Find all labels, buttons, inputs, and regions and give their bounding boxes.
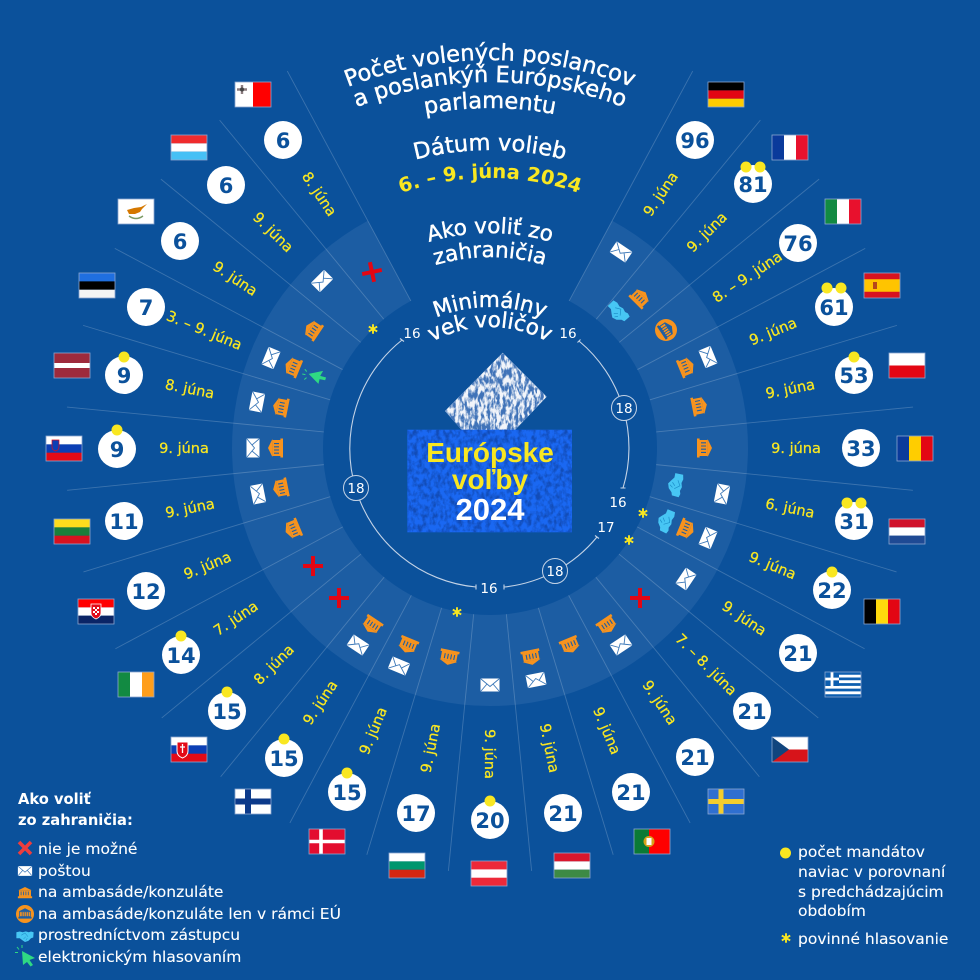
icon: post (311, 270, 333, 292)
flag: Slovakia (171, 737, 207, 762)
seats: Sweden: 21 (680, 746, 710, 770)
seats: Lithuania (105, 502, 143, 540)
country: Finland (235, 614, 384, 814)
icon: embassy (360, 614, 384, 637)
flag: Cyprus (118, 199, 154, 224)
icon: embassy (520, 648, 542, 667)
seats: Spain (815, 282, 853, 326)
heading: minimum voter age: Minimálny (432, 290, 548, 319)
country: Spain (676, 273, 900, 378)
seats: France (734, 162, 772, 203)
flag: Denmark (309, 829, 345, 854)
icon: post (698, 346, 718, 368)
icon: post (675, 567, 697, 591)
icon: post (249, 391, 265, 413)
seats: Hungary (544, 794, 582, 832)
icon: post (698, 527, 718, 549)
seats: Bulgaria (397, 794, 435, 832)
date: Latvia: 8. júna (164, 377, 216, 402)
icon: post (261, 347, 281, 369)
icon: proxy (666, 472, 684, 497)
icon: post (525, 672, 547, 688)
seats: Latvia: 9 (117, 364, 131, 388)
seats: Greece (779, 634, 817, 672)
flag: Croatia (78, 599, 114, 624)
legend: how to vote from abroad (15, 791, 341, 966)
flag: Portugal (634, 829, 670, 854)
seats: Sweden (676, 738, 714, 776)
minimum age ring chart: 18 (546, 564, 564, 580)
heading: minimum voter age line 2: vek voličov (427, 311, 553, 340)
flag: Latvia (54, 353, 90, 378)
icon: embassy (282, 355, 303, 378)
ballot box title (426, 437, 554, 527)
date: Italy: 8. – 9. júna (710, 249, 786, 306)
icon: compulsory voting (453, 607, 461, 617)
icon: embassy (282, 518, 303, 541)
icon: post (246, 438, 260, 458)
heading: election date value: 6. – 9. júna 2024 (399, 162, 581, 192)
flag: Netherlands (889, 519, 925, 544)
icon: embassy (559, 635, 582, 656)
seats: Poland (835, 352, 873, 394)
seats: Ireland: 14 (166, 644, 196, 668)
seats: Slovenia (98, 424, 136, 468)
seats: Denmark (328, 768, 366, 811)
seats: Lithuania: 11 (109, 510, 139, 534)
seats: Poland: 53 (839, 364, 869, 388)
flag: Spain (864, 273, 900, 298)
icon: post (609, 634, 633, 656)
country: Slovenia (46, 424, 283, 468)
seats: Netherlands (835, 498, 873, 540)
date: Netherlands: 6. júna (764, 496, 816, 522)
country: Greece (675, 567, 861, 697)
date: Portugal: 9. júna (589, 705, 623, 757)
legend icon: electronic voting (15, 945, 35, 966)
country: Latvia (54, 352, 290, 418)
icon: embassy (438, 648, 460, 667)
country: Denmark (309, 635, 419, 854)
icon: post (388, 656, 410, 676)
legend text: extra seats: počet mandátov (798, 843, 925, 861)
legend text: extra seats (798, 843, 946, 920)
flag: France (772, 135, 808, 160)
icon: embassy (301, 318, 324, 342)
seats: Germany: 96 (680, 129, 710, 153)
seats: Cyprus (161, 222, 199, 260)
seats: Portugal (612, 773, 650, 811)
country: France (604, 135, 808, 326)
date: Lithuania: 9. júna (164, 496, 216, 522)
country: Italy (651, 199, 861, 345)
icon: embassy (690, 395, 709, 417)
legend: extra seats and compulsory voting (780, 843, 948, 948)
minimum age ring chart (344, 326, 636, 597)
flag: Italy (825, 199, 861, 224)
flag: Ireland (118, 672, 154, 697)
seats: Malta: 6 (276, 129, 290, 153)
seats: Austria (471, 796, 509, 839)
date: Hungary: 9. júna (536, 722, 561, 774)
date: Germany: 9. júna (641, 169, 682, 220)
country: Poland (690, 352, 925, 417)
date: Slovakia: 8. júna (251, 642, 298, 688)
country: Austria (471, 678, 509, 886)
icon: embassy (396, 635, 419, 656)
legend dot: extra seats (780, 848, 791, 858)
legend text: extra seats: s predchádzajúcim (798, 883, 944, 901)
seats: Czechia (733, 692, 771, 730)
icon: compulsory voting (369, 324, 377, 334)
legend text: extra seats: obdobím (798, 902, 866, 920)
icon: embassy (271, 477, 290, 499)
legend text: extra seats: naviac v porovnaní (798, 863, 946, 881)
icon: compulsory voting (639, 508, 647, 518)
seats: Czechia: 21 (737, 700, 767, 724)
icon: embassy (676, 355, 697, 378)
seats: France: 81 (738, 173, 768, 197)
icon: embassy (271, 396, 290, 418)
country: Croatia (78, 518, 303, 624)
icon: not possible (303, 556, 323, 576)
date: Czechia: 7. – 8. júna (672, 631, 739, 699)
legend icon: embassy (18, 887, 32, 898)
minimum age ring chart: 17 (597, 520, 615, 536)
icon: compulsory voting (625, 535, 633, 545)
icon: embassy (676, 518, 697, 541)
country: Ireland (118, 556, 323, 697)
date: Romania: 9. júna (771, 441, 821, 457)
country: Malta (235, 82, 384, 284)
country: Bulgaria (389, 607, 461, 878)
seats: Belgium: 22 (817, 579, 847, 603)
seats: Bulgaria: 17 (401, 802, 431, 826)
flag: Austria (471, 861, 507, 886)
seats: Slovenia: 9 (110, 438, 124, 462)
seats: Slovakia (208, 686, 246, 730)
legend text: post: poštou (38, 862, 91, 880)
date: Poland: 9. júna (764, 377, 816, 402)
flag: Bulgaria (389, 853, 425, 878)
country: Cyprus (118, 199, 324, 342)
seats: Finland (265, 734, 303, 777)
seats: Latvia (105, 352, 143, 394)
flag: Poland (889, 353, 925, 378)
country: Germany (609, 82, 744, 263)
minimum age ring chart: 18 (615, 401, 633, 417)
flag: Belgium (864, 599, 900, 624)
seats: Austria: 20 (475, 809, 505, 833)
flag: Malta (235, 82, 271, 107)
date: Austria: 9. júna (481, 729, 497, 779)
legend icon: proxy (16, 931, 34, 942)
date: Denmark: 9. júna (357, 705, 391, 757)
country: Luxembourg (171, 135, 377, 334)
country: Netherlands (639, 472, 925, 544)
seats: Italy (779, 224, 817, 262)
icon: not possible (630, 588, 650, 608)
flag: Estonia (79, 273, 115, 298)
icon: not possible (329, 588, 349, 608)
flag: Romania (897, 436, 933, 461)
flag: Lithuania (54, 519, 90, 544)
seats: Germany (676, 121, 714, 159)
icon: post (609, 241, 633, 263)
flag: Germany (708, 82, 744, 107)
date: France: 9. júna (684, 210, 731, 256)
seats: Slovakia: 15 (212, 700, 242, 724)
legend text: proxy: prostredníctvom zástupcu (38, 926, 240, 944)
seats: Netherlands: 31 (839, 510, 869, 534)
seats: Belgium (813, 566, 851, 609)
date: Estonia: 3. – 9. júna (164, 309, 244, 354)
country: Slovakia (171, 588, 349, 762)
ballot paper (445, 353, 547, 430)
icon: not possible (360, 260, 384, 284)
date: Croatia: 9. júna (182, 549, 234, 583)
ballot box title: Európske (426, 437, 554, 468)
seats: Spain: 61 (819, 296, 849, 320)
country: Sweden (595, 614, 744, 814)
flag: Hungary (554, 853, 590, 878)
icon: embassy (628, 286, 652, 310)
minimum age ring chart: 16 (480, 581, 498, 597)
flag: Greece (825, 672, 861, 697)
icon: embassy (268, 438, 283, 458)
country: Lithuania (54, 477, 290, 544)
country: Romania (697, 429, 933, 467)
icon: post (714, 483, 730, 505)
legend text: embassy: na ambasáde/konzuláte (38, 883, 223, 901)
ring: how to vote from abroad band (232, 221, 748, 706)
legend text: not possible: nie je možné (38, 840, 137, 858)
legend icon: post (18, 866, 32, 876)
legend text: electronic voting: elektronickým hlasovaním (38, 948, 241, 966)
date: Belgium: 9. júna (746, 549, 798, 583)
icon: post (346, 634, 370, 656)
legend icon: embassy EU only (16, 905, 34, 923)
seats: Estonia (127, 288, 165, 326)
legend icon: not possible (19, 842, 31, 854)
ballot box (407, 430, 572, 532)
flag: Slovenia (46, 436, 82, 461)
heading: number of MEPs: Počet volených poslancov (344, 42, 636, 86)
seats: Denmark: 15 (332, 781, 362, 805)
seats: Greece: 21 (783, 642, 813, 666)
seats: Romania (842, 429, 880, 467)
date: Greece: 9. júna (719, 599, 769, 640)
icon: embassy (697, 438, 712, 458)
date: Slovenia: 9. júna (159, 441, 209, 457)
seats: Croatia: 12 (131, 580, 161, 604)
country: Belgium (625, 507, 900, 624)
seats: Ireland (162, 630, 200, 674)
seats: Cyprus: 6 (173, 230, 187, 254)
seats: Romania: 33 (846, 437, 876, 461)
heading: number of MEPs line 2: a poslankýň Európskeho (354, 64, 626, 106)
icon: electronic voting (299, 361, 329, 390)
heading: election date: Dátum volieb (414, 135, 566, 160)
seats: Luxembourg: 6 (219, 174, 233, 198)
date: Ireland: 7. júna (211, 599, 261, 640)
heading: number of MEPs line 3: parlamentu (424, 92, 556, 119)
country: Czechia (630, 588, 808, 762)
legend heading (18, 791, 133, 829)
seats: Malta (264, 121, 302, 159)
date: Finland: 9. júna (300, 678, 341, 728)
flag: Sweden (708, 789, 744, 814)
minimum age ring chart: 18 (347, 481, 365, 497)
seats: Hungary: 21 (548, 802, 578, 826)
date: Bulgaria: 9. júna (419, 722, 444, 774)
flag: Finland (235, 789, 271, 814)
date: Spain: 9. júna (747, 315, 799, 349)
heading: how to vote from abroad line 2: zahraničia (433, 242, 545, 265)
country: Estonia (79, 273, 329, 390)
icon: proxy (654, 507, 676, 534)
icon: post (480, 678, 500, 692)
minimum age ring chart: 16 (403, 326, 421, 342)
minimum age ring chart: 16 (559, 326, 577, 342)
legend heading: zo zahraničia: (18, 812, 133, 829)
flag: Czechia (772, 737, 808, 762)
legend text: compulsory voting: povinné hlasovanie (798, 930, 948, 948)
icon: embassy (595, 614, 619, 637)
country: Portugal (559, 635, 670, 854)
ballot box title: 2024 (456, 492, 525, 527)
flag: Luxembourg (171, 135, 207, 160)
icon: post (250, 483, 266, 505)
icon: proxy (604, 299, 631, 326)
seats: Italy: 76 (783, 232, 813, 256)
seats: Estonia: 7 (139, 296, 153, 320)
date: Luxembourg: 9. júna (249, 210, 296, 256)
minimum age ring chart: 16 (609, 495, 627, 511)
country: Hungary (520, 648, 590, 878)
legend star: compulsory voting (782, 933, 790, 943)
legend text: embassy EU only: na ambasáde/konzuláte len v rámci EÚ (38, 904, 341, 923)
ballot box title: voľby (452, 464, 528, 495)
date: Sweden: 9. júna (639, 678, 680, 728)
date: Cyprus: 9. júna (210, 259, 260, 300)
seats: Croatia (127, 572, 165, 610)
seats: Luxembourg (207, 166, 245, 204)
seats: Portugal: 21 (616, 781, 646, 805)
seats: Finland: 15 (269, 747, 299, 771)
date: Malta: 8. júna (298, 169, 339, 220)
icon: embassy EU only (651, 315, 681, 345)
heading: how to vote from abroad: Ako voliť zo (428, 216, 552, 242)
legend heading: Ako voliť (18, 791, 92, 808)
